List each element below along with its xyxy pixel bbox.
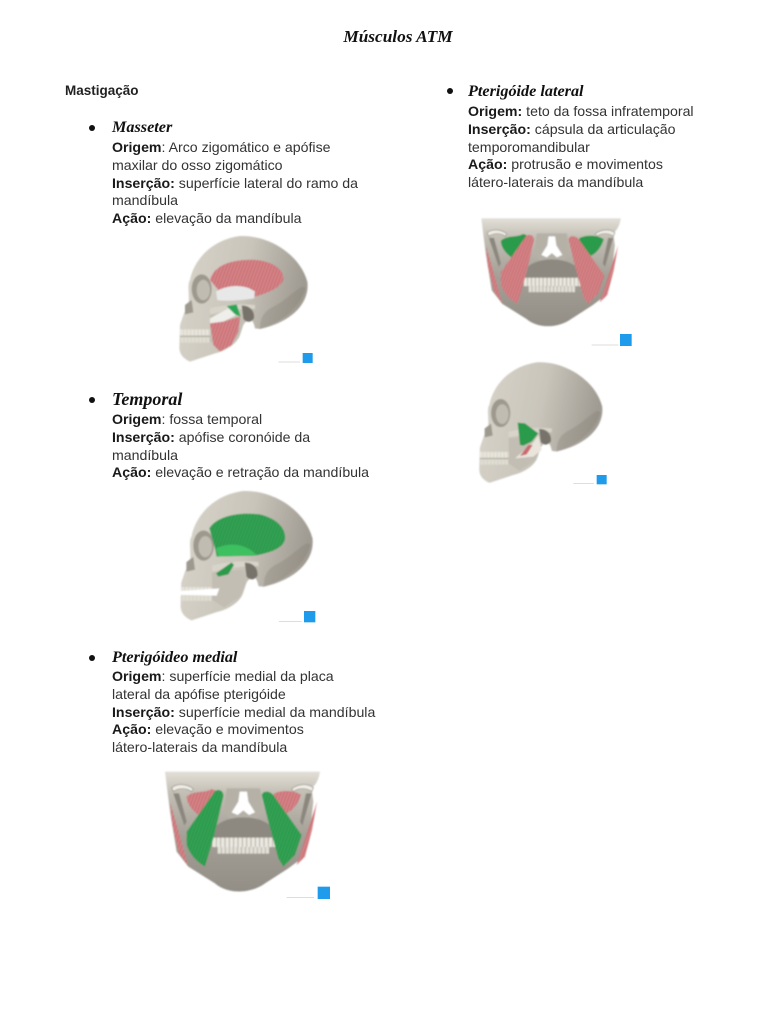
text block: Pterigóide lateral <box>468 103 694 190</box>
text block: Pterigóideo medial: Inserção: superfície medial da mandíbula <box>112 704 375 720</box>
heading: Pterigóideo medial: Pterigóideo medial <box>112 648 237 666</box>
panel: Pterigóide lateral <box>447 82 694 484</box>
heading: Masseter: Masseter <box>112 118 172 136</box>
text block: Pterigóideo medial: lateral da apófise pterigóide <box>112 686 286 702</box>
text block: Pterigóideo medial: Origem: superfície medial da placa <box>112 668 334 684</box>
illustration: side skull with lateral pterygoid <box>478 362 607 484</box>
panel: Temporal <box>89 389 369 622</box>
text block: Temporal: Ação: elevação e retração da mandíbula <box>112 464 369 480</box>
panel: Masseter <box>89 118 358 363</box>
text block: Pterigóide lateral: temporomandibular <box>468 138 590 154</box>
heading: Pterigóide lateral: Pterigóide lateral <box>468 82 584 100</box>
text block: Pterigóideo medial <box>112 668 376 755</box>
text block: Masseter: Ação: elevação da mandíbula <box>112 210 301 226</box>
section heading: Mastigação: Mastigação <box>65 83 139 98</box>
text block: Masseter: Origem: Arco zigomático e apófise <box>112 139 331 155</box>
text block: Temporal: Inserção: apófise coronóide da <box>112 429 310 445</box>
text block: Temporal <box>112 411 369 480</box>
text block: Pterigóide lateral: Ação: protrusão e movimentos <box>468 156 663 172</box>
bullet <box>89 397 95 403</box>
text block: Masseter: maxilar do osso zigomático <box>112 157 283 173</box>
text block: Pterigóideo medial: látero-laterais da mandíbula <box>112 739 287 755</box>
bullet <box>447 88 453 94</box>
title: Músculos ATM <box>343 27 453 46</box>
text block: Pterigóide lateral: Origem: teto da fossa infratemporal <box>468 103 694 119</box>
text block: Masseter <box>112 139 358 226</box>
text block: Pterigóide lateral: látero-laterais da mandíbula <box>468 174 643 190</box>
bullet <box>89 125 95 131</box>
illustration: skull with masseter <box>178 235 313 363</box>
heading: Temporal: Temporal <box>112 389 182 409</box>
illustration: front skull with lateral pterygoid <box>481 218 632 346</box>
text block: Pterigóide lateral: Inserção: cápsula da articulação <box>468 121 676 137</box>
text block: Temporal: mandíbula <box>112 446 178 462</box>
illustration: front skull with medial pterygoid <box>164 771 330 899</box>
panel: Pterigóideo medial <box>89 648 376 899</box>
text block: Pterigóideo medial: Ação: elevação e movimentos <box>112 721 304 737</box>
text block: Temporal: Origem: fossa temporal <box>112 411 262 427</box>
text block: Masseter: Inserção: superfície lateral do ramo da <box>112 174 358 190</box>
illustration: skull with temporal <box>180 490 316 622</box>
bullet <box>89 655 95 661</box>
text block: Masseter: mandíbula <box>112 192 178 208</box>
